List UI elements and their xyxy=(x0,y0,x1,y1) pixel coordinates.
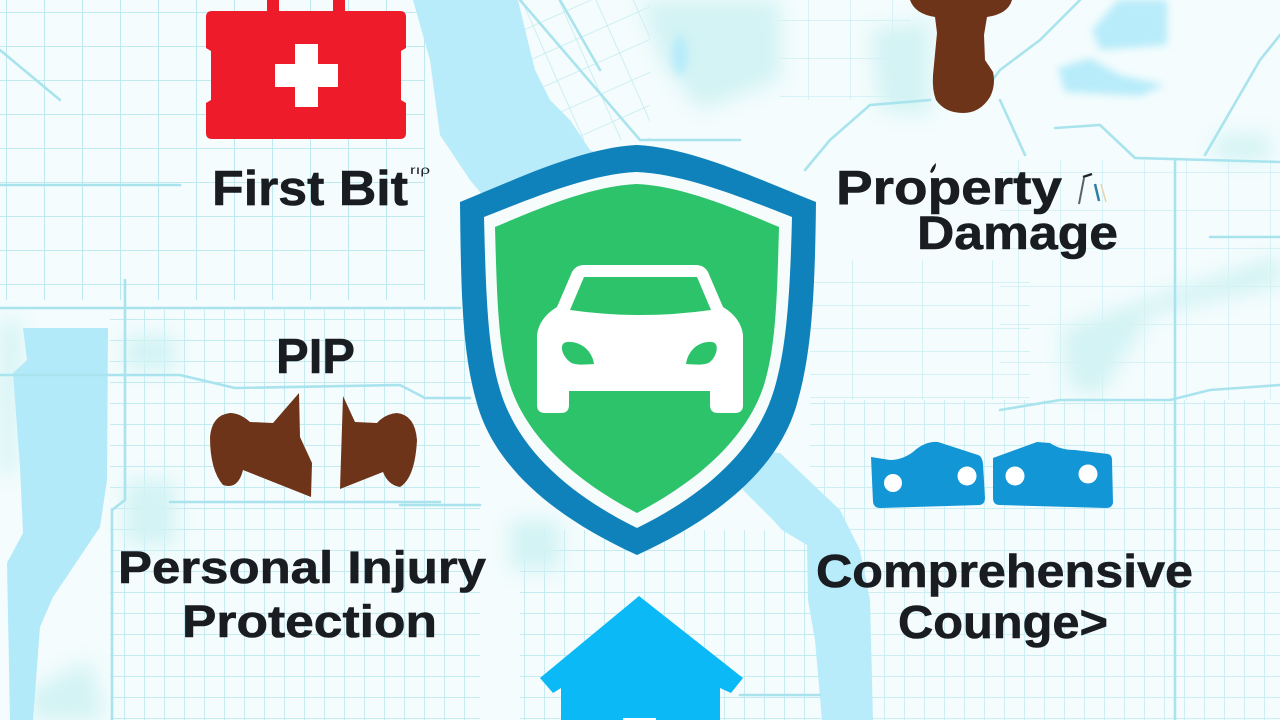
icon: blue comprehensive shapes xyxy=(871,442,1113,508)
heading: Property Damage xyxy=(836,162,1118,259)
heading: Personal Injury Protection xyxy=(118,542,486,647)
heading: First Bit: rıρ xyxy=(410,163,430,177)
heading: Comprehensive Counge xyxy=(816,545,1193,648)
heading: Personal Injury Protection: Protection xyxy=(182,596,437,647)
shield: white ring xyxy=(484,172,792,528)
heading: Property Damage: Damage xyxy=(917,206,1118,259)
heading: First Bit: First Bit xyxy=(212,162,408,216)
icon: first aid kit xyxy=(206,0,406,139)
heading: Personal Injury Protection: Personal Injury xyxy=(118,542,486,593)
icon: brown PIP shapes xyxy=(210,393,417,497)
shield: outer blue xyxy=(460,145,816,555)
heading: Property Damage: Property xyxy=(836,162,1062,215)
river: upper xyxy=(413,0,640,240)
icon: blue house xyxy=(540,596,743,720)
river: lower xyxy=(740,450,873,720)
icon: brown property damage shape xyxy=(910,0,1012,113)
water: left shoreline xyxy=(7,328,108,720)
shield: green fill xyxy=(495,184,779,513)
heading: PIP: PIP xyxy=(276,330,355,384)
heading: Comprehensive Counge: Comprehensive xyxy=(816,545,1193,597)
icon: car xyxy=(537,265,743,413)
shield with car xyxy=(460,145,816,555)
heading: Comprehensive Counge: Counge> xyxy=(898,596,1108,648)
